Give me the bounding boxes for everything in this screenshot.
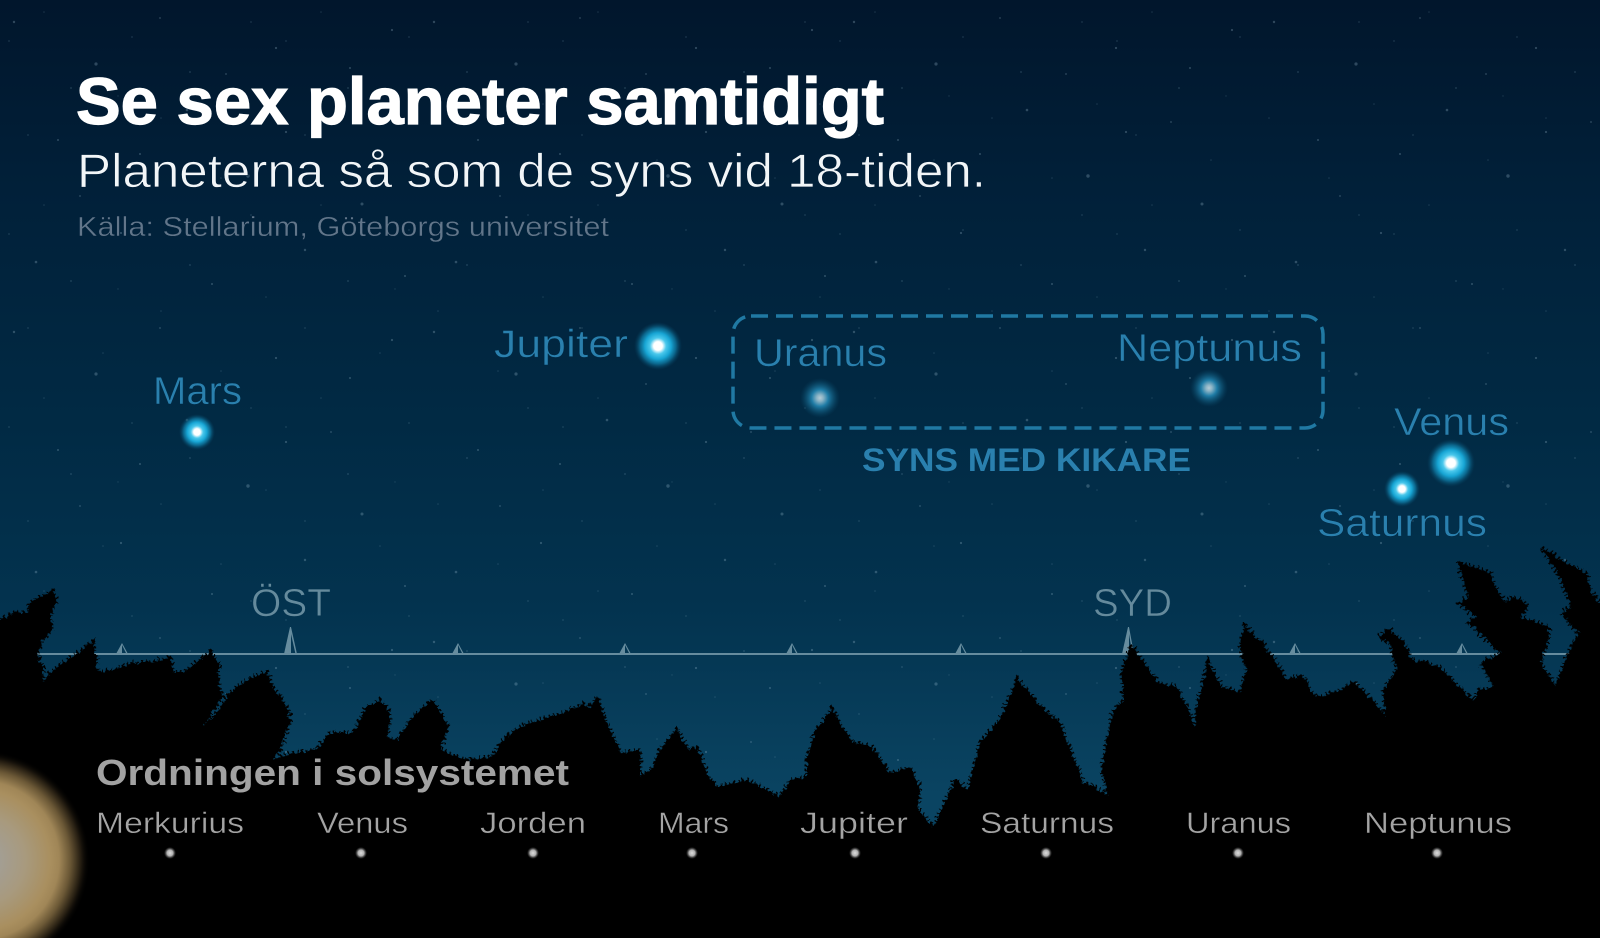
Uranus: Uranus bbox=[1186, 807, 1291, 840]
compass label: south: SYD bbox=[1093, 582, 1172, 625]
Mars: Mars bbox=[658, 807, 729, 840]
planet: Mars: Mars bbox=[153, 370, 242, 413]
Mars bbox=[658, 807, 729, 859]
planet: Saturnus: Saturnus bbox=[1317, 502, 1487, 545]
Neptunus bbox=[1364, 807, 1512, 859]
Jorden bbox=[480, 807, 586, 859]
planet: Venus bbox=[1394, 401, 1509, 487]
Saturnus: Saturnus bbox=[980, 807, 1114, 840]
horizon compass line with ticks bbox=[35, 627, 1596, 655]
subtitle: Planeterna så som de syns vid 18-tiden. bbox=[77, 144, 986, 197]
planet: Neptunus: Neptunus bbox=[1117, 327, 1302, 370]
Venus: Venus bbox=[317, 807, 408, 840]
tree silhouette bbox=[0, 548, 1600, 938]
planet: Jupiter: Jupiter bbox=[494, 323, 628, 366]
planet: Uranus bbox=[754, 332, 887, 418]
solar system order panel bbox=[96, 752, 1512, 859]
Jupiter: Jupiter bbox=[800, 807, 908, 840]
Jorden: Jorden bbox=[480, 807, 586, 840]
compass label: east: ÖST bbox=[251, 582, 331, 625]
title: Se sex planeter samtidigt bbox=[76, 64, 884, 138]
Neptunus: Neptunus bbox=[1364, 807, 1512, 840]
binocular group box bbox=[733, 316, 1323, 478]
Jupiter bbox=[800, 807, 908, 859]
Merkurius: Merkurius bbox=[96, 807, 244, 840]
dashed frame bbox=[733, 316, 1323, 428]
planet: Venus: Venus bbox=[1394, 401, 1509, 444]
Venus bbox=[317, 807, 408, 859]
planet: Neptunus bbox=[1117, 327, 1302, 407]
planet: Jupiter bbox=[494, 322, 682, 370]
planet: Uranus: Uranus bbox=[754, 332, 887, 375]
caption: SYNS MED KIKARE bbox=[862, 442, 1191, 478]
Uranus bbox=[1186, 807, 1291, 859]
Merkurius bbox=[96, 807, 244, 859]
planet: Mars bbox=[153, 370, 242, 450]
planet: Saturnus bbox=[1317, 471, 1487, 545]
Saturnus bbox=[980, 807, 1114, 859]
source: Källa: Stellarium, Göteborgs universitet bbox=[77, 211, 609, 242]
heading: Ordningen i solsystemet bbox=[96, 752, 569, 793]
sun bbox=[0, 750, 90, 938]
